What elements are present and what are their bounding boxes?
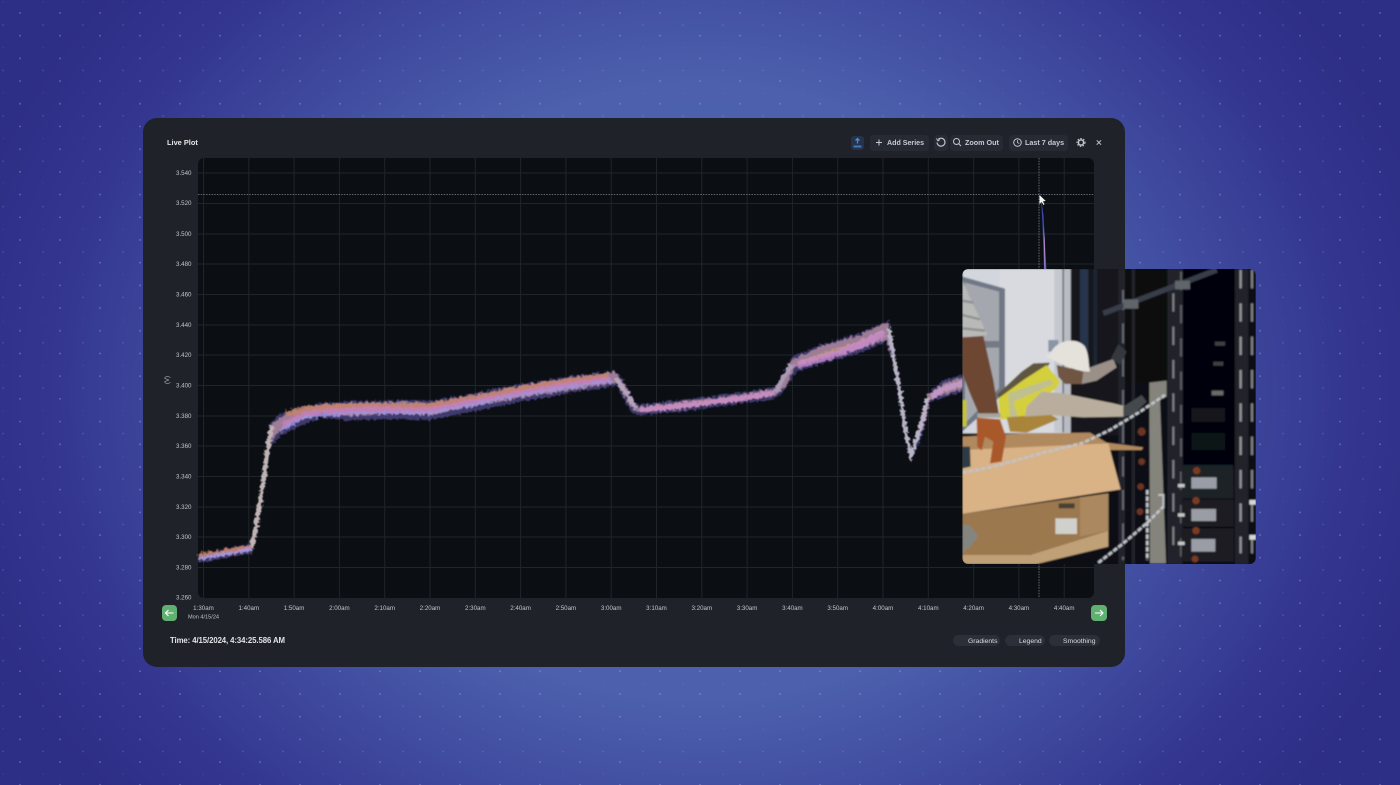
y axis labels: 3.300 [176,534,192,541]
toggle: Legend: Legend [1019,638,1042,645]
button: Add Series: Add Series [887,139,924,147]
left person glove and strap [977,413,1001,418]
x axis labels: 3:40am [782,605,803,612]
x axis labels: 3:30am [737,605,757,612]
button: reset [934,135,948,151]
y axis labels: 3.260 [176,594,192,602]
y axis unit: (V) [165,376,171,384]
mesh panel [962,277,1005,432]
y axis labels: 3.460 [176,292,192,298]
x axis labels: 2:40am [510,605,531,612]
icon: upload [851,136,864,150]
y axis labels: 3.440 [176,322,192,329]
rack background [1072,269,1118,436]
button: Last 7 days: Last 7 days [1025,138,1064,147]
x axis labels: 2:50am [556,605,576,612]
x axis labels: 2:10am [374,605,395,612]
toggle: Gradients [953,635,1000,646]
toggle: Smoothing [1049,635,1100,646]
y axis labels: 3.280 [176,564,192,572]
button: next arrow [1091,605,1107,621]
y axis labels: 3.320 [176,504,192,511]
x axis labels: 4:10am [918,605,939,612]
faint rack lights [1192,342,1225,450]
y axis labels: 3.380 [176,413,192,420]
metal post [1149,381,1167,563]
x axis labels: 3:00am [601,605,622,612]
text: cursor timestamp: Time: 4/15/2024, 4:34:25.586 AM [170,636,285,645]
toggle: Legend [1005,635,1045,646]
y axis labels: 3.340 [176,474,192,480]
chart: voltage line plot [165,158,1094,620]
y axis labels: 3.520 [176,200,192,207]
x axis labels: 4:40am [1054,605,1075,612]
vest bottom post [962,400,967,427]
chains [962,395,1165,563]
x axis labels: 1:30am [193,605,214,612]
x axis labels: 4:30am [1009,605,1029,612]
toggle: Smoothing: Smoothing [1063,638,1096,645]
rack uprights [1118,269,1248,564]
x axis labels: 3:20am [691,605,712,612]
x axis labels: 1:40am [238,605,259,612]
icon: settings gear [1077,138,1085,146]
y axis labels: 3.500 [176,231,192,238]
x axis labels: 1:50am [284,605,304,612]
panel: live plot window [143,118,1125,667]
worker face and helmet [1057,365,1083,384]
button: Add Series [870,135,929,151]
x axis labels: 2:00am [329,605,350,612]
plot area [198,158,1094,598]
x axis labels [188,605,1075,620]
y axis labels: 3.400 [176,382,192,390]
x axis labels: 4:00am [873,605,893,612]
worker harness [997,363,1050,402]
y axis labels: 3.540 [176,170,192,177]
data series band [198,197,1046,563]
button: Zoom Out: Zoom Out [965,138,1000,147]
icon: close [1097,140,1101,145]
worker arms [1025,392,1127,417]
button: previous arrow [162,605,177,621]
x axis labels: Mon 4/15/24 [188,614,219,620]
x axis labels: 2:30am [465,605,486,612]
battery modules [1178,465,1257,562]
y axis labels: 3.360 [176,443,192,450]
x axis labels: 2:20am [420,605,440,612]
x axis labels: 3:50am [827,605,848,612]
crosshair cursor lines [198,158,1094,598]
photo: worker installing battery racks [962,269,1256,564]
left person shirt and arm [962,280,987,337]
toolbar [851,135,1101,151]
cardboard boxes [962,433,1143,450]
y axis labels [176,170,192,602]
white wall [962,269,1071,433]
x axis labels: 4:20am [963,605,984,612]
button: Zoom Out [950,135,1003,151]
y axis labels: 3.420 [176,352,192,359]
orange lamps lower rack [1137,428,1146,515]
x axis labels: 3:10am [646,605,667,612]
icon: mouse cursor [1040,195,1046,205]
worker vest [998,365,1060,419]
y axis labels: 3.480 [176,261,192,268]
toggle: Gradients: Gradients [968,638,998,645]
button: Last 7 days [1009,135,1068,151]
diagonal beam [1103,270,1217,313]
heading: Live Plot: Live Plot [167,138,198,147]
